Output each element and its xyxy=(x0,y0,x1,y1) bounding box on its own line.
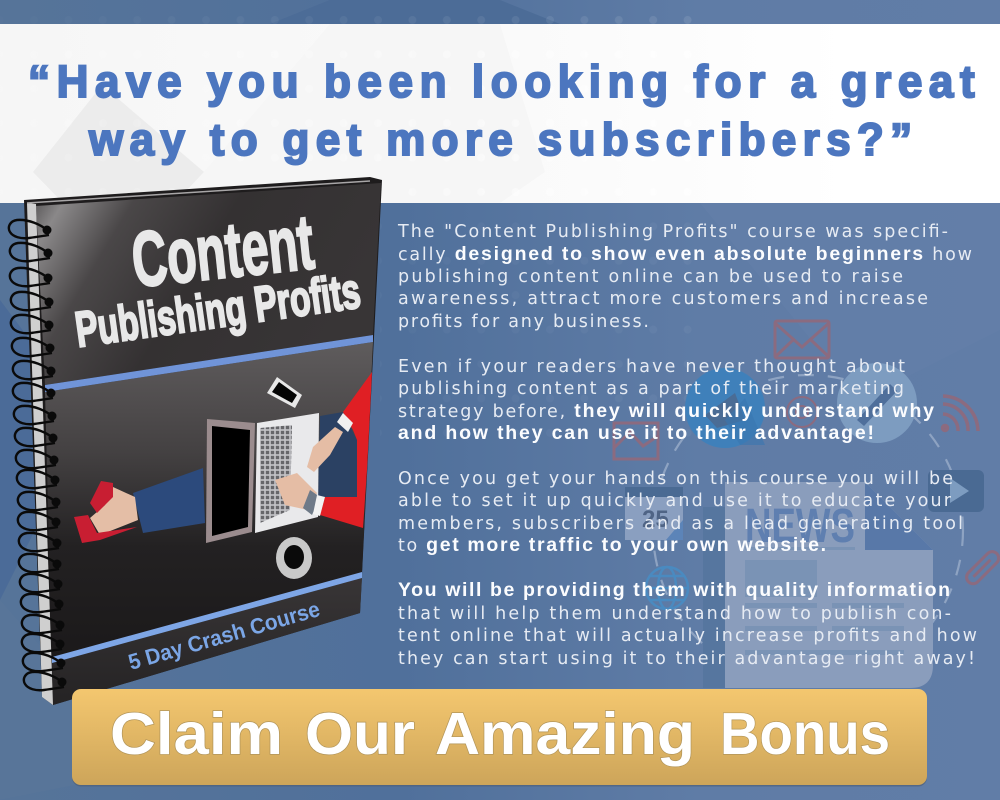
icon: paperclip xyxy=(964,549,1000,586)
button label: Our xyxy=(305,701,415,767)
spiral binding xyxy=(9,220,66,690)
icon: envelope top xyxy=(775,321,829,358)
cover title: Publishing Profits xyxy=(72,262,364,358)
cover title: Content xyxy=(128,197,318,304)
paragraph 2 xyxy=(398,357,934,444)
paragraph 3: able to set it up quickly and use it to educate your xyxy=(398,491,952,511)
icon: envelope left xyxy=(614,423,658,459)
cover top panel xyxy=(36,183,381,385)
woman and laptop xyxy=(74,372,372,543)
icon: at sign xyxy=(787,397,817,427)
icon: calendar xyxy=(625,487,683,540)
call to action button xyxy=(72,689,927,786)
headline: “Have you been looking for a great xyxy=(28,58,975,107)
paragraph 2: Even if your readers have never thought about xyxy=(398,357,905,377)
blue stripe upper xyxy=(45,335,373,392)
paragraph 3 xyxy=(398,469,963,556)
cover bottom strip xyxy=(52,578,362,705)
spine strip xyxy=(27,203,53,705)
page edge highlight xyxy=(27,181,370,203)
paragraph 4 xyxy=(398,579,977,669)
button label: Claim xyxy=(110,701,283,767)
news document xyxy=(703,482,933,688)
paragraph 2: and how they can use it to their advantage! xyxy=(398,422,874,444)
blue stripe lower xyxy=(52,572,362,663)
decorative marketing illustration xyxy=(614,321,1000,688)
news document: NEWS xyxy=(745,500,855,553)
paragraph 1: The "Content Publishing Profits" course was specifi- xyxy=(397,222,948,242)
cover subtitle: 5 Day Crash Course xyxy=(125,596,323,675)
icon: video xyxy=(928,470,984,512)
paragraph 1: awareness, attract more customers and increase xyxy=(398,289,928,309)
button label: Amazing xyxy=(435,701,695,767)
button label xyxy=(110,701,890,767)
body copy xyxy=(397,222,977,669)
book xyxy=(9,177,382,705)
cover title xyxy=(72,197,364,358)
paragraph 4: You will be providing them with quality information xyxy=(398,579,950,601)
white header band xyxy=(0,24,1000,203)
icon: calendar: 25 xyxy=(642,506,669,533)
paragraph 1: cally designed to show even absolute beginners how xyxy=(398,243,972,265)
paragraph 4: that will help them understand how to publish con- xyxy=(398,604,951,624)
cover image panel xyxy=(45,342,373,657)
headline xyxy=(28,58,975,165)
icon: signal xyxy=(942,396,978,431)
coffee cup xyxy=(276,537,312,579)
icon: globe xyxy=(646,567,688,609)
paragraph 3: members, subscribers and as a lead generating tool xyxy=(398,514,963,534)
icon: pencil xyxy=(837,363,917,443)
dashed circle xyxy=(653,375,963,685)
paragraph 3: to get more traffic to your own website. xyxy=(398,534,826,556)
book back and pages xyxy=(24,177,382,705)
headline: way to get more subscribers?” xyxy=(88,116,912,165)
paragraph 2: strategy before, they will quickly understand why xyxy=(398,400,934,422)
paragraph 4: they can start using it to their advantage right away! xyxy=(398,649,975,669)
icon: megaphone xyxy=(685,368,765,448)
paragraph 4: tent online that will actually increase profits and how xyxy=(398,626,977,646)
paragraph 2: publishing content as a part of their marketing xyxy=(398,379,904,399)
phone xyxy=(267,377,302,408)
paragraph 1: profits for any business. xyxy=(398,312,649,332)
background xyxy=(0,0,692,800)
paragraph 1 xyxy=(397,222,972,332)
paragraph 1: publishing content online can be used to raise xyxy=(398,267,903,287)
paragraph 3: Once you get your hands on this course you will be xyxy=(398,469,953,489)
button label: Bonus xyxy=(720,701,890,767)
